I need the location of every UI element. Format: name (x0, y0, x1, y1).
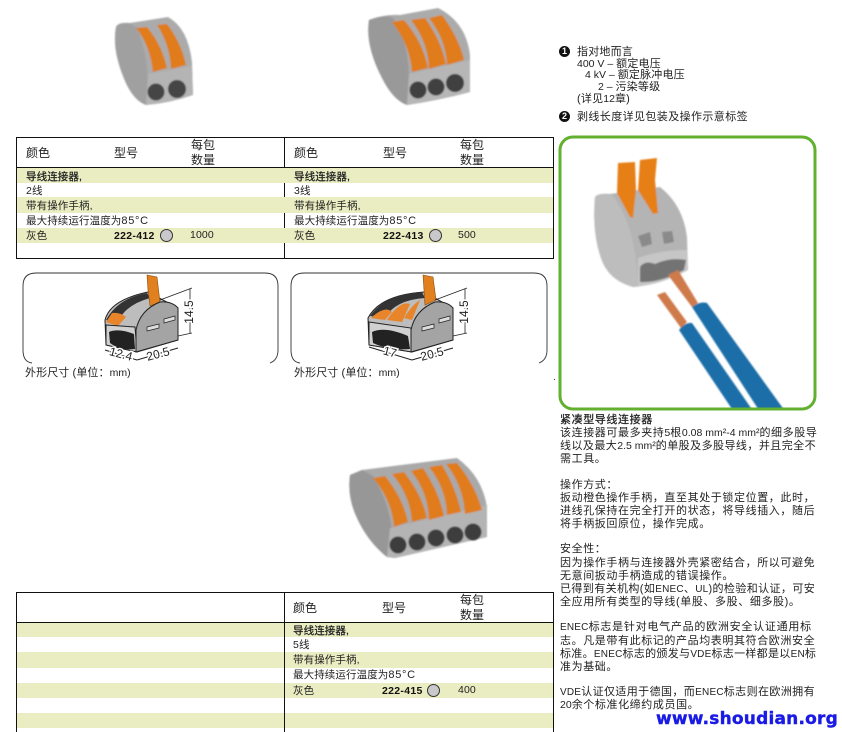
table header: 型号 (383, 146, 407, 160)
photo: three-lever connector (367, 7, 471, 106)
description rows (294, 171, 476, 242)
table header: 型号 (382, 601, 406, 615)
description rows: 灰色 (294, 230, 315, 242)
footnote 1: voltage ratings: 2 – 污染等级 (598, 81, 660, 93)
dimension: length 20.5: 20.5 (145, 344, 171, 364)
description rows: 灰色 (26, 230, 47, 242)
text block: safety: 全应用所有类型的导线(单股、多股、细多股)。 (560, 596, 801, 608)
description rows: 灰色 (293, 685, 314, 697)
icon: number two: 2 (562, 111, 567, 121)
table header: 颜色 (294, 146, 318, 160)
stray mark (554, 379, 555, 380)
drawing: connector (368, 275, 453, 352)
caption: dimensions 2 wire: 外形尺寸 (单位：mm) (25, 367, 131, 379)
text block: compact connector: 该连接器可最多夹持5根0.08 mm²-4 mm²的细多股导 (560, 427, 817, 439)
text block: operation: 扳动橙色操作手柄，直至其处于锁定位置，此时， (560, 492, 815, 504)
description rows: 带有操作手柄, (293, 654, 360, 666)
table header: 颜色 (26, 146, 50, 160)
photo: two-lever connector (114, 16, 194, 106)
text block: safety (560, 542, 815, 608)
dimension: length 20.5 (412, 344, 453, 364)
text block: operation: 操作方式： (560, 479, 618, 491)
table header (293, 593, 484, 622)
text block: safety: 已得到有关机构(如ENEC、UL)的检验和认证，可安 (560, 583, 815, 595)
text block: operation: 进线孔保持在完全打开的状态，将导线插入，随后 (560, 505, 815, 517)
table header: 数量 (191, 153, 215, 167)
icon: number two (559, 111, 570, 122)
text block: ENEC: 准为基础。 (560, 661, 618, 673)
description rows: 带有操作手柄, (294, 200, 361, 212)
drawing: connector (105, 275, 178, 352)
footnote 1: voltage ratings: 400 V – 额定电压 (577, 58, 661, 70)
text block: ENEC: ENEC标志是针对电气产品的欧洲安全认证通用标 (560, 621, 812, 633)
text block: safety: 安全性： (560, 543, 606, 555)
text block: VDE: 20余个标准化缔约成员国。 (560, 699, 699, 711)
panel: connector with wires photo (558, 136, 816, 410)
text block: compact connector: 紧凑型导线连接器 (560, 414, 653, 426)
photo: five-lever connector (348, 457, 488, 559)
description rows: 3线 (294, 185, 311, 197)
caption: dimensions 3 wire: 外形尺寸 (单位：mm) (294, 367, 400, 379)
table: 222-413 (284, 137, 554, 259)
dimension drawing panel: 2 wire (22, 272, 278, 364)
footnote 1: voltage ratings: (详见12章) (577, 93, 630, 105)
dimension: width 12.4: 12.4 (108, 344, 134, 364)
text block: safety: 因为操作手柄与连接器外壳紧密结合，所以可避免 (560, 557, 815, 569)
description rows: 2线 (26, 185, 43, 197)
description rows: 导线连接器, (294, 171, 350, 183)
watermark: www.shoudian.org (656, 709, 838, 729)
description rows: 222-415 (382, 685, 423, 697)
table header: 每包 (460, 593, 484, 607)
table header: 数量 (460, 608, 484, 622)
text block: ENEC: 志。凡是带有此标记的产品均表明其符合欧洲安全 (560, 635, 815, 647)
description rows (26, 171, 214, 242)
dimension: width 17 (369, 344, 412, 361)
table header: 数量 (460, 153, 484, 167)
table: 222-412 (16, 137, 285, 259)
dimension: height 14.5 (160, 288, 196, 336)
dimension: length 20.5: 20.5 (419, 344, 445, 364)
dimension: height 14.5: 14.5 (457, 300, 471, 324)
text block: operation: 将手柄扳回原位，操作完成。 (560, 518, 711, 530)
dimension: length 20.5 (137, 344, 178, 364)
description rows (293, 625, 476, 697)
icon: number one: 1 (562, 46, 567, 56)
table header (294, 138, 484, 167)
description rows: 500 (458, 229, 476, 241)
footnote 1: voltage ratings (559, 46, 685, 105)
text block: compact connector: 线以及最大2.5 mm²的单股及多股导线，并且完全不 (560, 440, 816, 452)
description rows: 5线 (293, 639, 310, 651)
table header (26, 138, 215, 167)
description rows: 带有操作手柄, (26, 200, 93, 212)
text block: compact connector (560, 414, 817, 465)
description rows: 最大持续运行温度为85°C (293, 669, 416, 681)
footnote 1: voltage ratings: 4 kV – 额定脉冲电压 (585, 69, 685, 81)
footnote 1: voltage ratings: 指对地而言 (577, 46, 633, 58)
text block: VDE: VDE认证仅适用于德国，而ENEC标志则在欧洲拥有 (560, 686, 815, 698)
table header: 每包 (191, 138, 215, 152)
table header: 每包 (460, 138, 484, 152)
footnote 2: stripping length: 剥线长度详见包装及操作示意标签 (577, 111, 748, 123)
description rows: 最大持续运行温度为85°C (26, 215, 149, 227)
dimension: height 14.5 (435, 288, 471, 336)
dimension drawing panel: 3 wire (290, 272, 548, 364)
icon: number one (559, 46, 570, 57)
text block: operation (560, 478, 815, 530)
text block: VDE (560, 686, 815, 711)
text block: compact connector: 需工具。 (560, 453, 606, 465)
text block: ENEC: 标准。ENEC标志的颁发与VDE标志一样都是以EN标 (560, 648, 816, 660)
dimension: width 17: 17 (382, 344, 399, 361)
description rows: 导线连接器, (26, 171, 82, 183)
text block: safety: 无意间扳动手柄造成的错误操作。 (560, 570, 734, 582)
text block: ENEC (560, 620, 816, 673)
table header: 型号 (114, 146, 138, 160)
description rows: 222-412 (114, 230, 155, 242)
table: 222-415 (16, 592, 554, 732)
table header: 颜色 (293, 601, 317, 615)
description rows: 最大持续运行温度为85°C (294, 215, 417, 227)
description rows: 导线连接器, (293, 625, 349, 637)
description rows: 222-413 (383, 230, 424, 242)
description rows: 400 (458, 684, 476, 696)
dimension: height 14.5: 14.5 (182, 300, 196, 324)
description rows: 1000 (190, 229, 214, 241)
